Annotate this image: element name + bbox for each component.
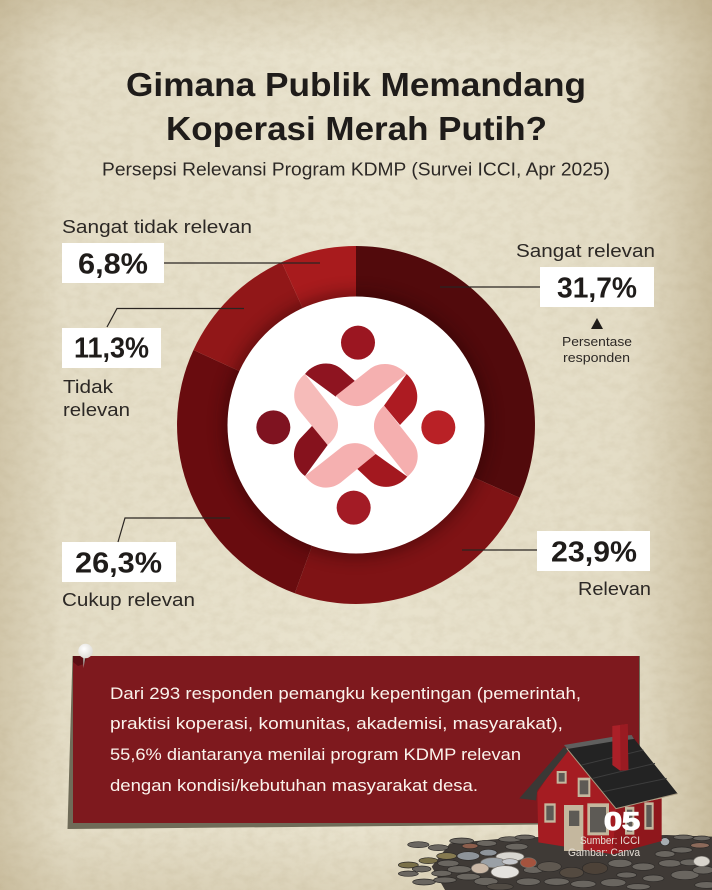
- segment: sangat tidak relevan 6,8%: [282, 246, 356, 425]
- label: cukup relevan: 26,3%: [75, 548, 162, 580]
- label: sangat relevan: Sangat relevan: [516, 240, 655, 261]
- illustration: red house: [519, 724, 678, 854]
- label: sangat tidak relevan: Sangat tidak relevan: [62, 216, 252, 237]
- label: cukup relevan: Cukup relevan: [62, 589, 195, 610]
- note: persentase responden: [562, 318, 632, 365]
- label: cukup relevan: [62, 518, 230, 610]
- logo: Koperasi Merah Putih: [256, 326, 455, 525]
- page number: 05: [604, 808, 640, 836]
- panel: summary note: [68, 656, 640, 829]
- label: sangat tidak relevan: 6,8%: [78, 248, 148, 280]
- illustration: coins pile: [398, 835, 712, 890]
- label: sangat relevan: 31,7%: [557, 272, 637, 304]
- summary text: [110, 684, 581, 795]
- source credit: Gambar: Canva: [568, 847, 641, 859]
- source credit: Sumber: ICCI: [580, 835, 640, 847]
- subtitle: Persepsi Relevansi Program KDMP (Survei ICCI, Apr 2025): [102, 160, 610, 180]
- summary text: Dari 293 responden pemangku kepentingan (pemerintah,: [110, 684, 581, 703]
- logo dark ribbons: [294, 363, 417, 487]
- white centre: [228, 296, 484, 554]
- house roof: [565, 736, 678, 809]
- note: persentase responden: Persentase: [562, 334, 632, 349]
- house chimney: [612, 724, 628, 771]
- title: Koperasi Merah Putih?: [166, 110, 547, 147]
- source credit: [568, 835, 641, 859]
- label: relevan: [462, 531, 651, 599]
- label: relevan: Relevan: [578, 578, 651, 599]
- title: [126, 66, 586, 147]
- segment: relevan 23,9%: [295, 425, 520, 604]
- house walls: [537, 748, 617, 854]
- label: tidak relevan: 11,3%: [74, 332, 149, 364]
- summary text: praktisi koperasi, komunitas, akademisi, masyarakat),: [110, 714, 563, 733]
- segment: tidak relevan 11,3%: [194, 262, 356, 425]
- logo pink ribbons: [294, 364, 418, 488]
- note: persentase responden: responden: [563, 350, 630, 365]
- label: relevan: 23,9%: [551, 536, 637, 568]
- logo people heads: [256, 326, 455, 525]
- inner shadow: [223, 292, 489, 558]
- label: tidak relevan: relevan: [63, 399, 130, 420]
- house windows and door: [544, 771, 654, 851]
- icon: push pin: [73, 644, 93, 668]
- summary text: dengan kondisi/kebutuhan masyarakat desa.: [110, 776, 478, 795]
- title: Gimana Publik Memandang: [126, 66, 586, 103]
- donut chart: [177, 246, 535, 604]
- segment: cukup relevan 26,3%: [177, 350, 356, 593]
- segment: sangat relevan 31,7%: [356, 246, 535, 498]
- summary text: 55,6% diantaranya menilai program KDMP relevan: [110, 745, 521, 764]
- label: tidak relevan: Tidak: [63, 376, 114, 397]
- label: sangat relevan: [440, 240, 655, 307]
- label: tidak relevan: [62, 308, 244, 420]
- label: sangat tidak relevan: [62, 216, 320, 283]
